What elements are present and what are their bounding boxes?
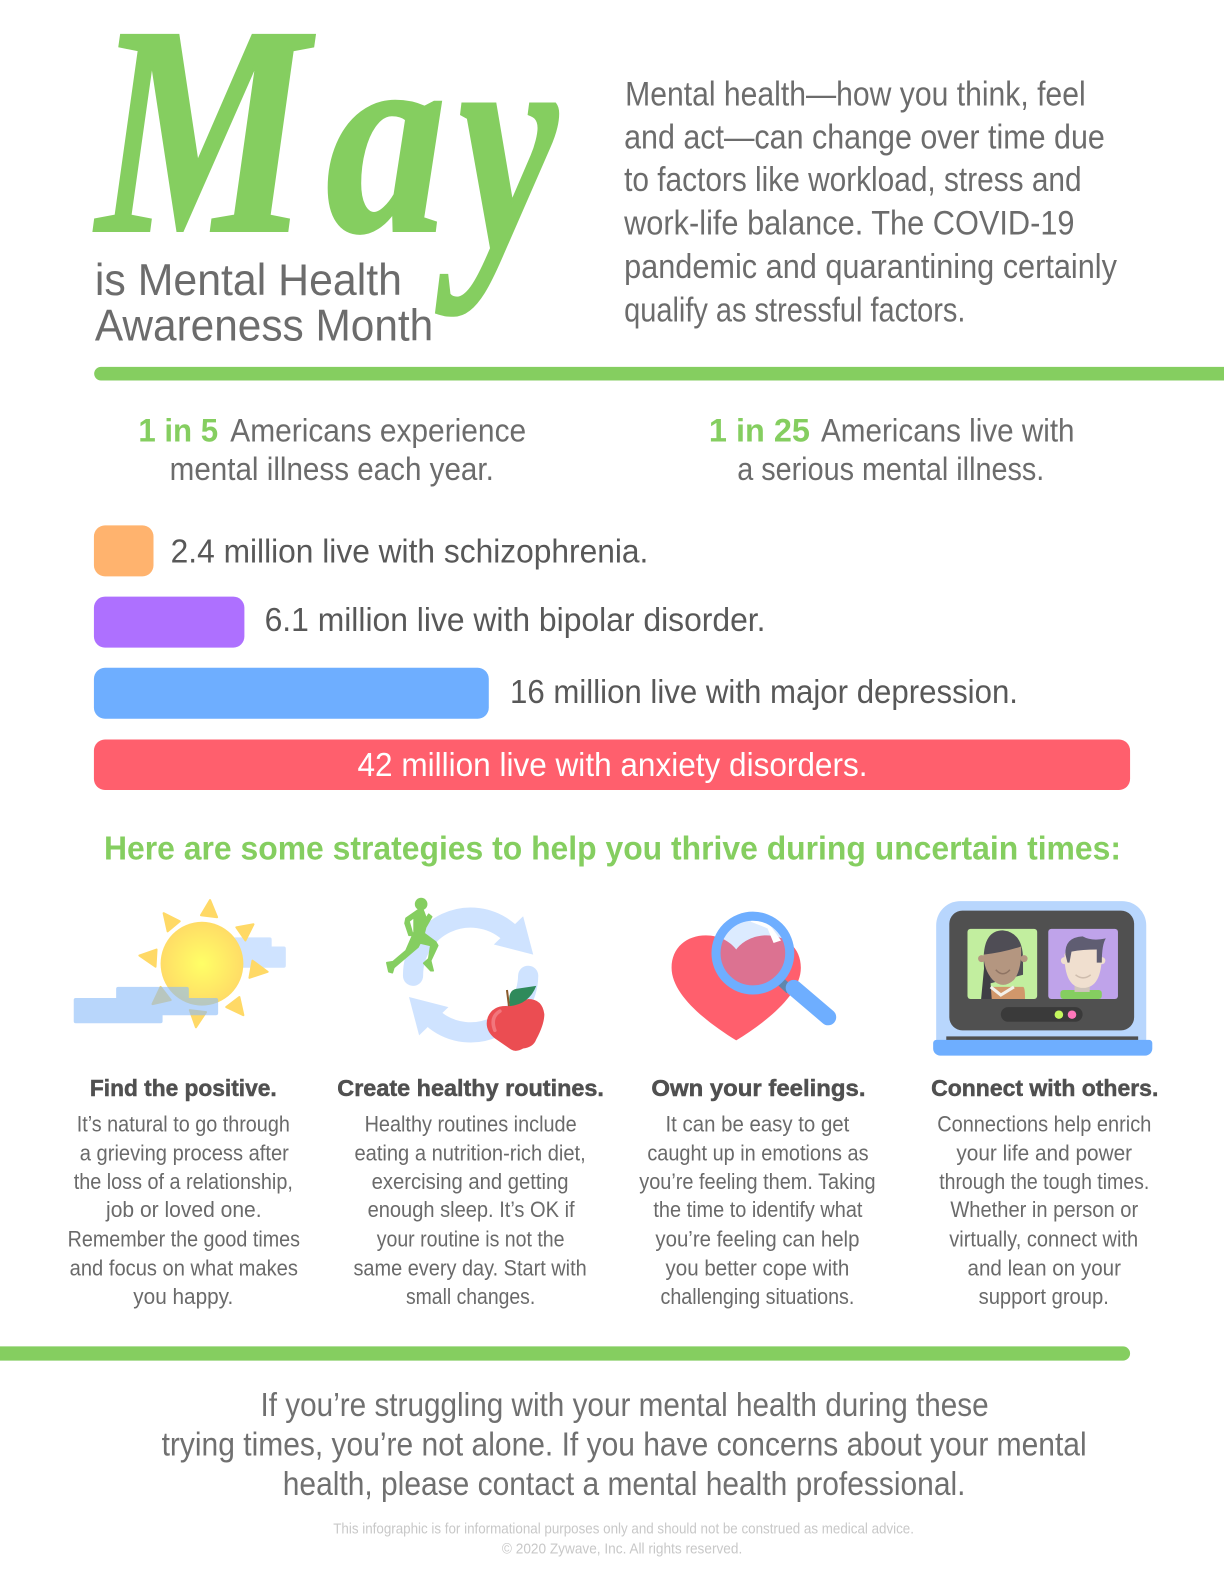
strategy: find the positive: job or loved one. xyxy=(105,1197,262,1222)
subtitle: is Mental Health xyxy=(95,256,402,305)
closing message xyxy=(162,1387,1087,1503)
intro paragraph: work-life balance. The COVID-19 xyxy=(623,205,1075,243)
strategy: find the positive: It’s natural to go through xyxy=(77,1111,290,1136)
strategy: find the positive xyxy=(68,1075,300,1309)
strategy: find the positive: you happy. xyxy=(133,1284,233,1309)
disclaimer: This infographic is for informational purposes only and should not be construed as medical advice. xyxy=(333,1521,914,1537)
strategy: own your feelings xyxy=(639,1075,876,1309)
strategy: connect with others: Connect with others. xyxy=(931,1075,1158,1101)
strategy: create healthy routines: eating a nutrition-rich diet, xyxy=(354,1141,586,1166)
strategy: create healthy routines: small changes. xyxy=(406,1284,535,1309)
bar: bipolar disorder xyxy=(94,597,766,648)
bar: schizophrenia xyxy=(94,525,648,576)
strategy: connect with others: Whether in person or xyxy=(950,1197,1139,1222)
strategy: connect with others: virtually, connect with xyxy=(949,1226,1138,1251)
icon: heart under magnifying glass xyxy=(672,916,828,1040)
title: May is Mental Health Awareness Month xyxy=(93,0,560,351)
strategy: find the positive: Remember the good times xyxy=(68,1226,300,1251)
cycle arrows xyxy=(413,918,528,1032)
strategy: connect with others: your life and power xyxy=(956,1141,1133,1166)
heading: strategies: Here are some strategies to help you thrive during uncertain times: xyxy=(104,831,1121,868)
runner xyxy=(387,899,438,973)
video tile: woman xyxy=(967,929,1037,999)
stat: 1 in 5: 1 in 5 xyxy=(138,413,218,449)
strategy: create healthy routines: your routine is not the xyxy=(377,1226,565,1251)
strategy: own your feelings: Own your feelings. xyxy=(651,1075,865,1101)
bar: anxiety disorders xyxy=(94,739,1130,790)
video tile: man xyxy=(1048,929,1118,999)
strategy: connect with others: support group. xyxy=(979,1284,1109,1309)
strategy: find the positive: the loss of a relationship, xyxy=(74,1169,293,1194)
strategy: find the positive: Find the positive. xyxy=(90,1075,277,1101)
strategy: own your feelings: the time to identify what xyxy=(653,1197,862,1222)
closing message: trying times, you’re not alone. If you have concerns about your mental xyxy=(162,1427,1087,1464)
strategy: own your feelings: challenging situations. xyxy=(660,1284,854,1309)
icon: sun and clouds xyxy=(76,900,284,1027)
call controls xyxy=(1001,1007,1083,1022)
strategy: create healthy routines: exercising and getting xyxy=(372,1169,569,1194)
intro paragraph xyxy=(623,75,1118,329)
closing message: If you’re struggling with your mental health during these xyxy=(261,1387,989,1424)
intro paragraph: pandemic and quarantining certainly xyxy=(624,248,1118,286)
disclaimer: © 2020 Zywave, Inc. All rights reserved. xyxy=(502,1541,742,1557)
intro paragraph: to factors like workload, stress and xyxy=(624,161,1082,199)
strategy: connect with others: and lean on your xyxy=(967,1256,1122,1281)
bar: schizophrenia: 2.4 million live with schizophrenia. xyxy=(171,534,648,571)
bar: major depression: 16 million live with major depression. xyxy=(510,674,1018,711)
bar: anxiety disorders: 42 million live with anxiety disorders. xyxy=(358,747,868,784)
strategy: own your feelings: you’re feeling them. Taking xyxy=(639,1169,876,1194)
apple xyxy=(487,986,544,1051)
subtitle: Awareness Month xyxy=(95,302,433,351)
strategy: find the positive: and focus on what makes xyxy=(70,1256,298,1281)
stat: 1 in 5 xyxy=(138,413,526,487)
strategy: connect with others: through the tough times. xyxy=(939,1169,1149,1194)
bottom green divider bar xyxy=(0,1346,1130,1361)
stat: 1 in 25: Americans live with xyxy=(821,413,1075,449)
strategy: own your feelings: It can be easy to get xyxy=(666,1111,849,1136)
bar: major depression xyxy=(94,668,1018,719)
intro paragraph: qualify as stressful factors. xyxy=(624,291,965,329)
icon: routine cycle with runner and apple xyxy=(387,899,544,1051)
strategy: own your feelings: you’re feeling can help xyxy=(655,1226,859,1251)
stat: 1 in 25: 1 in 25 xyxy=(709,413,810,449)
strategy: find the positive: a grieving process after xyxy=(80,1141,289,1166)
bar chart: prevalence xyxy=(94,525,1130,790)
strategy: create healthy routines: Healthy routines include xyxy=(365,1111,577,1136)
stat: 1 in 25: a serious mental illness. xyxy=(737,451,1044,487)
strategy: create healthy routines xyxy=(337,1075,604,1309)
intro paragraph: and act—can change over time due xyxy=(624,119,1105,157)
icon: laptop video call xyxy=(933,901,1152,1056)
strategy: create healthy routines: Create healthy routines. xyxy=(337,1075,604,1101)
strategy: create healthy routines: enough sleep. It’s OK if xyxy=(368,1197,575,1222)
bar: bipolar disorder: 6.1 million live with bipolar disorder. xyxy=(265,602,766,639)
top green divider bar xyxy=(94,367,1224,380)
strategy: connect with others xyxy=(931,1075,1158,1309)
stat: 1 in 5: mental illness each year. xyxy=(170,451,494,487)
closing message: health, please contact a mental health professional. xyxy=(283,1466,965,1503)
stat: 1 in 25 xyxy=(709,413,1075,487)
strategy: own your feelings: you better cope with xyxy=(666,1256,849,1281)
strategy: connect with others: Connections help enrich xyxy=(937,1111,1151,1136)
subtitle xyxy=(95,256,433,351)
stat: 1 in 5: Americans experience xyxy=(230,413,526,449)
intro paragraph: Mental health—how you think, feel xyxy=(625,75,1086,113)
strategy: create healthy routines: same every day. Start with xyxy=(353,1256,587,1281)
strategy: own your feelings: caught up in emotions as xyxy=(647,1141,869,1166)
disclaimer xyxy=(333,1521,914,1557)
